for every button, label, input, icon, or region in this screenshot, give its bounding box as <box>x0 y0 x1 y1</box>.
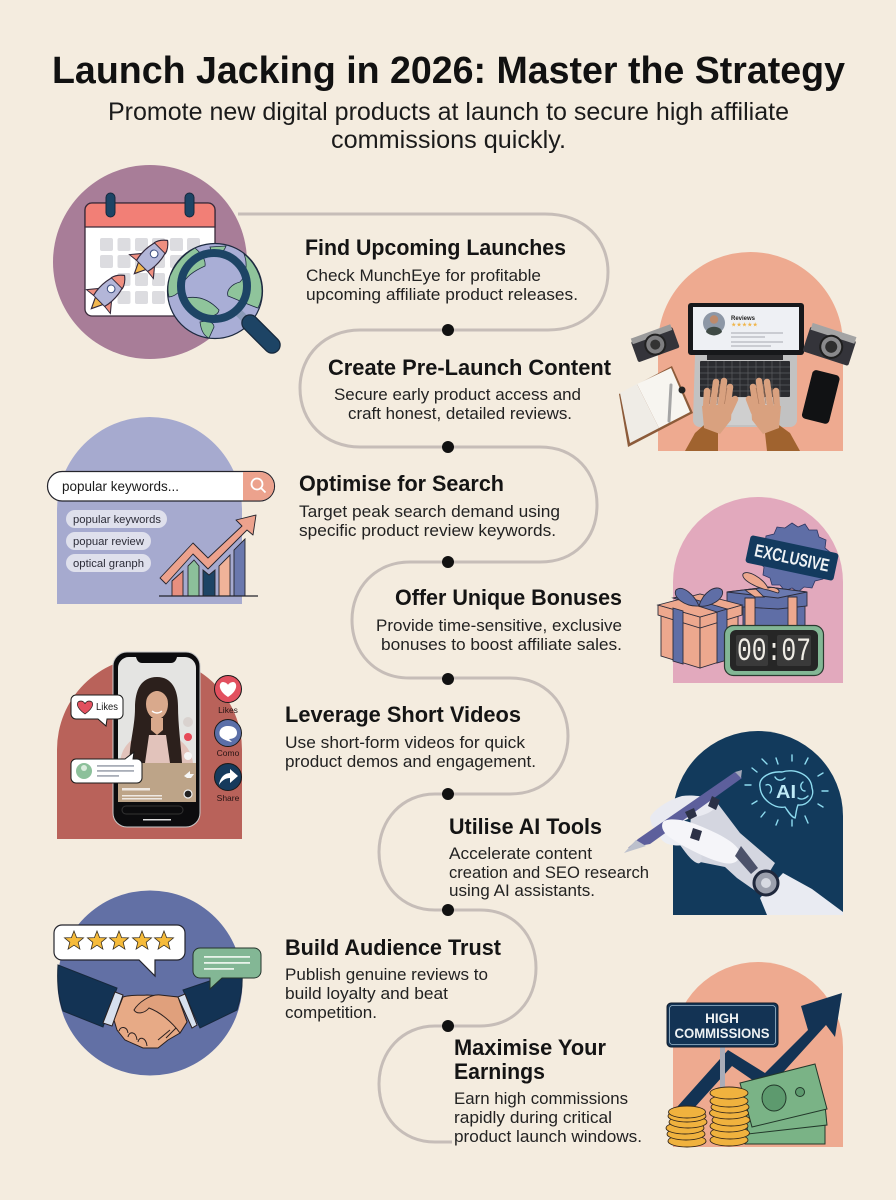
icon: left gift box <box>658 588 742 668</box>
step 1 text: Find Upcoming Launches <box>305 235 566 260</box>
step 8 text: product launch windows. <box>454 1128 642 1146</box>
icon: right sleeve <box>183 970 242 1028</box>
callout: likes bubble <box>71 695 123 726</box>
icon: share button <box>214 764 242 803</box>
step 2 text: Secure early product access and <box>334 386 581 404</box>
badge: exclusive <box>745 523 839 592</box>
step 3 text: Target peak search demand using <box>299 503 560 521</box>
icon: left sleeve <box>58 965 117 1027</box>
step 4 text: Offer Unique Bonuses <box>395 585 622 610</box>
subtitle <box>108 98 789 154</box>
icon: likes button <box>214 676 242 715</box>
step 8 text: Maximise Your <box>454 1035 606 1060</box>
icon: globe <box>168 244 262 338</box>
step 1 text: Check MunchEye for profitable <box>306 267 541 285</box>
sign: high commissions: HIGH <box>705 1011 739 1026</box>
step 2 text: craft honest, detailed reviews. <box>348 405 572 423</box>
step 8 text: Earn high commissions <box>454 1090 628 1108</box>
step 6 text: creation and SEO research <box>449 864 649 882</box>
icon: calendar <box>85 193 215 316</box>
icon: glowing AI brain: AI <box>776 782 796 802</box>
path node dots <box>442 324 454 1032</box>
subtitle: Promote new digital products at launch to secure high affiliate <box>108 98 789 126</box>
keyword chips: popuar review <box>73 536 144 548</box>
icon: rising arrow <box>677 993 842 1107</box>
step 5 text: Use short-form videos for quick <box>285 734 526 752</box>
icon: left coin stack <box>666 1106 707 1147</box>
step 3 text: specific product review keywords. <box>299 522 556 540</box>
step 4 text: bonuses to boost affiliate sales. <box>381 636 622 654</box>
title: Launch Jacking in 2026: Master the Strategy <box>52 50 845 92</box>
step 7 text: build loyalty and beat <box>285 985 448 1003</box>
icon: laptop: ★★★★★ <box>731 322 758 328</box>
icon: rocket lower <box>79 263 137 321</box>
icon: glowing AI brain <box>745 755 828 826</box>
icon: comment button: Como <box>217 748 240 758</box>
callout: five star rating <box>54 925 185 976</box>
icon: laptop: Reviews <box>731 316 756 322</box>
icon: notebook <box>619 366 693 447</box>
step 4 text <box>376 585 622 654</box>
icon: likes button: Likes <box>218 705 238 715</box>
step 7 text: Build Audience Trust <box>285 935 502 960</box>
panel: laptop review desk illustration <box>619 252 857 451</box>
step 2 text: Create Pre-Launch Content <box>328 355 612 380</box>
icon: right coin stack <box>710 1087 750 1146</box>
panel: handshake and reviews illustration <box>54 890 261 1076</box>
icon: comment button <box>214 720 242 758</box>
winding path connector <box>238 214 608 1142</box>
search bar: popular keywords... <box>62 479 179 494</box>
panel: short video phone illustration <box>57 652 242 839</box>
step 1 text <box>305 235 578 304</box>
callout: green comment bubble <box>193 948 261 989</box>
step 5 text <box>285 702 536 771</box>
step 6 text: using AI assistants. <box>449 882 595 900</box>
search bar <box>48 472 274 501</box>
icon: share button: Share <box>217 793 240 803</box>
icon: countdown timer: 00:07 <box>737 633 811 670</box>
icon: rocket upper <box>122 228 180 286</box>
step 3 text <box>299 471 560 540</box>
icon: handshake <box>103 992 197 1048</box>
icon: countdown timer <box>724 626 824 676</box>
sign: high commissions: COMMISSIONS <box>674 1026 770 1041</box>
icon: smartphone <box>801 369 840 425</box>
panel: search and keywords illustration <box>48 417 274 604</box>
panel: robot hand and AI brain illustration <box>624 731 843 915</box>
icon: right gift box <box>727 573 807 640</box>
panel: exclusive gifts and timer illustration <box>658 497 843 683</box>
keyword chips: optical granph <box>73 558 144 570</box>
keyword chips: popular keywords <box>73 514 162 526</box>
icon: camera left <box>630 324 680 362</box>
step 2 text <box>328 355 612 423</box>
icon: camera right <box>802 323 857 366</box>
icon: laptop <box>688 303 804 427</box>
step 8 text <box>454 1035 642 1146</box>
step 5 text: product demos and engagement. <box>285 753 536 771</box>
step 8 text: rapidly during critical <box>454 1109 612 1127</box>
step 8 text: Earnings <box>454 1059 545 1084</box>
panel: high commissions illustration <box>666 962 843 1147</box>
step 6 text <box>449 814 649 900</box>
step 4 text: Provide time-sensitive, exclusive <box>376 617 622 635</box>
step 6 text: Accelerate content <box>449 845 592 863</box>
keyword chips <box>66 510 167 572</box>
sign: high commissions <box>667 1003 778 1092</box>
step 7 text: competition. <box>285 1004 377 1022</box>
step 1 text: upcoming affiliate product releases. <box>306 286 578 304</box>
callout: likes bubble: Likes <box>96 702 118 713</box>
icon: typing hands <box>685 381 800 451</box>
icon: magnifying glass <box>181 253 272 345</box>
step 5 text: Leverage Short Videos <box>285 702 521 727</box>
bar chart with rising arrow <box>159 515 258 596</box>
subtitle: commissions quickly. <box>331 126 566 154</box>
icon: banknotes <box>740 1064 827 1144</box>
panel: calendar and globe illustration <box>53 165 272 359</box>
step 7 text: Publish genuine reviews to <box>285 966 488 984</box>
icon: robot hand holding pen <box>624 770 843 915</box>
step 6 text: Utilise AI Tools <box>449 814 602 839</box>
step 3 text: Optimise for Search <box>299 471 504 496</box>
callout: comment bubble <box>71 752 142 783</box>
icon: smartphone with video <box>113 652 200 827</box>
step 7 text <box>285 935 502 1022</box>
badge: exclusive: EXCLUSIVE <box>753 540 831 576</box>
